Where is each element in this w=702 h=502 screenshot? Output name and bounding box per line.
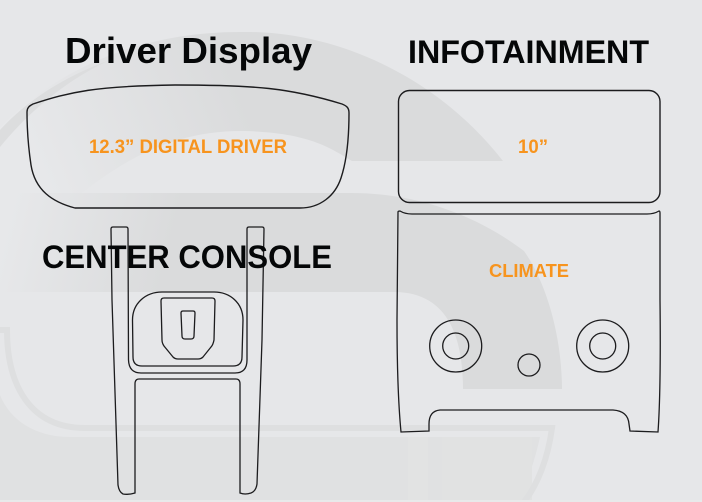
outline: infotainment screen [398,90,660,202]
console shield [161,298,215,359]
outline: climate panel [397,211,660,432]
label: 10 inch: 10” [518,137,548,158]
climate knob left [430,320,482,372]
label: climate: CLIMATE [489,261,569,281]
climate small knob [518,354,540,376]
heading: Driver Display: Driver Display [65,30,312,71]
outline: driver display [27,85,349,208]
console inner panel [132,292,243,366]
outline: center console [111,227,264,494]
heading: Infotainment: INFOTAINMENT [408,34,649,70]
heading: Center Console: CENTER CONSOLE [42,239,332,275]
console slot [181,311,195,339]
label: 12.3 inch digital driver: 12.3” DIGITAL DRIVER [89,137,287,158]
climate knob right [577,320,629,372]
